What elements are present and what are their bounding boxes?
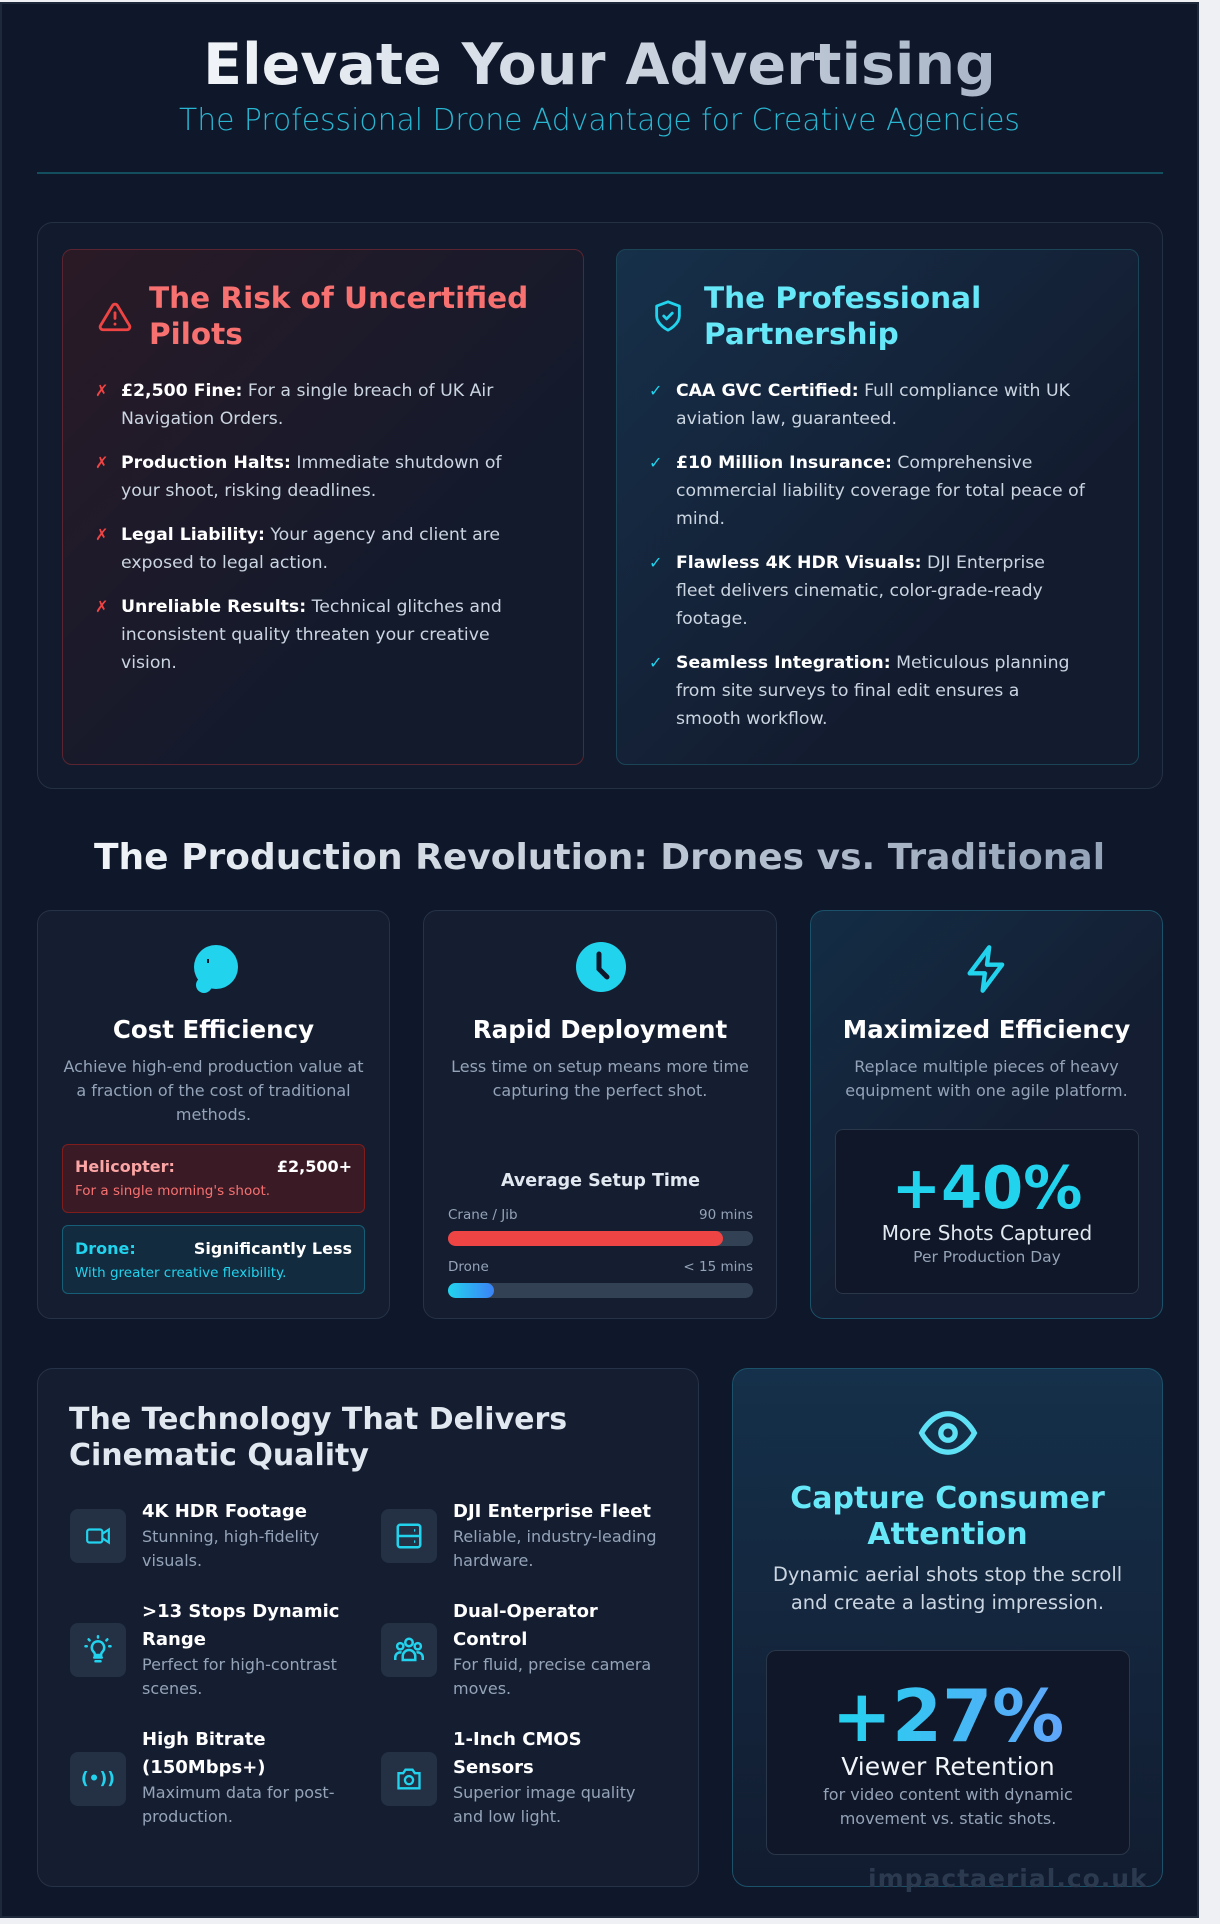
panel: risk of uncertified pilots [62, 249, 584, 765]
item: 4K HDR: fleet delivers cinematic, color-grade-ready [676, 581, 1043, 601]
item: CMOS: Sensors [453, 1757, 534, 1778]
item: fine: £2,500 Fine: For a single breach of UK Air [121, 381, 493, 401]
item: 4K HDR: Flawless 4K HDR Visuals: DJI Enterprise [676, 553, 1045, 573]
item: DJI fleet: hardware. [453, 1551, 533, 1570]
heading: Attention [867, 1517, 1028, 1552]
chart: average setup time: Crane / Jib [448, 1207, 518, 1223]
stat box: +27%: movement vs. static shots. [840, 1809, 1056, 1828]
item: dual operator: Control [453, 1629, 527, 1650]
item: bitrate: (150Mbps+) [142, 1757, 266, 1778]
title: Rapid Deployment [473, 1015, 727, 1044]
description: Achieve high-end production value at a fraction of the cost of traditional methods. [63, 1057, 364, 1124]
icon: clock [576, 942, 626, 992]
item: 4K HDR: Stunning, high-fidelity [142, 1527, 319, 1546]
box: drone: Drone: [75, 1239, 136, 1258]
item: integration [676, 653, 1070, 729]
item: dynamic range [70, 1601, 339, 1698]
title: Elevate Your Advertising [203, 32, 996, 98]
panel: professional partnership: ✓ [649, 381, 662, 400]
item: insurance [676, 453, 1086, 529]
item: 4K HDR [70, 1501, 319, 1570]
icon: piggy/coin [194, 945, 238, 993]
item: legal liability: exposed to legal action. [121, 553, 328, 573]
stat box: +27%: for video content with dynamic [823, 1785, 1073, 1804]
item: dual operator: Dual-Operator [453, 1601, 598, 1622]
panel: risk of uncertified pilots: ✗ [95, 597, 108, 616]
item: integration: from site surveys to final edit ensures a [676, 681, 1019, 701]
card: maximized efficiency [810, 910, 1163, 1319]
item: unreliable: Unreliable Results: Technical glitches and [121, 597, 502, 617]
icon: lightning [968, 945, 1004, 993]
item: DJI fleet: Reliable, industry-leading [453, 1527, 657, 1546]
section heading: The Production Revolution: Drones vs. Traditional [94, 837, 1105, 878]
item: unreliable [121, 597, 502, 673]
item: integration: Seamless Integration: Meticulous planning [676, 653, 1070, 673]
item: bitrate: (•)) [81, 1769, 115, 1789]
item: bitrate: High Bitrate [142, 1729, 266, 1750]
stat box: +40% [835, 1129, 1139, 1294]
item: 4K HDR: visuals. [142, 1551, 202, 1570]
item: CAA: CAA GVC Certified: Full compliance with UK [676, 381, 1070, 401]
item: CMOS: and low light. [453, 1807, 561, 1826]
item: DJI fleet [381, 1501, 657, 1570]
chart: average setup time: Drone [448, 1259, 489, 1275]
box: helicopter: For a single morning's shoot. [75, 1183, 270, 1199]
item: production halts [121, 453, 502, 501]
chart: average setup time [448, 1171, 753, 1298]
item: legal liability: Legal Liability: Your agency and client are [121, 525, 500, 545]
stat box: +27% [766, 1650, 1130, 1855]
box: helicopter: £2,500+ [277, 1157, 352, 1176]
heading: technology [69, 1402, 567, 1473]
box: drone [62, 1225, 365, 1294]
item: CMOS [381, 1729, 635, 1826]
item: dual operator: moves. [453, 1679, 511, 1698]
item: unreliable: inconsistent quality threaten your creative [121, 625, 490, 645]
panel: technology [37, 1368, 699, 1887]
item: bitrate: Maximum data for post- [142, 1783, 334, 1802]
stat box: +27%: +27% [832, 1674, 1064, 1758]
heading: risk [149, 281, 528, 351]
heading: risk: Pilots [149, 317, 243, 351]
panel: professional partnership: ✓ [649, 553, 662, 572]
item: CAA: aviation law, guaranteed. [676, 409, 897, 429]
item: fine: Navigation Orders. [121, 409, 283, 429]
card: rapid deployment [423, 910, 777, 1319]
item: fine [121, 381, 494, 429]
box: helicopter [62, 1144, 365, 1213]
item: CMOS: Superior image quality [453, 1783, 635, 1802]
item: CAA [676, 381, 1070, 429]
panel: professional partnership: ✓ [649, 653, 662, 672]
item: insurance: mind. [676, 509, 725, 529]
item: bitrate [70, 1729, 334, 1826]
chart: average setup time: 90 mins [699, 1207, 753, 1223]
item: CMOS: 1-Inch CMOS [453, 1729, 582, 1750]
item: 4K HDR: footage. [676, 609, 748, 629]
panel: professional partnership: ✓ [649, 453, 662, 472]
icon: warning [98, 302, 132, 332]
item: dynamic range: scenes. [142, 1679, 202, 1698]
description: Dynamic aerial shots stop the scroll [773, 1563, 1122, 1586]
box: helicopter: Helicopter: [75, 1157, 175, 1176]
heading: partnership: The Professional [704, 281, 981, 315]
heading: technology: The Technology That Delivers [69, 1402, 567, 1437]
heading: risk: The Risk of Uncertified [149, 281, 528, 315]
heading: Capture Consumer [790, 1481, 1105, 1516]
panel: risk of uncertified pilots: ✗ [95, 381, 108, 400]
item: dynamic range: Range [142, 1629, 206, 1650]
item: dynamic range: Perfect for high-contrast [142, 1655, 337, 1674]
item: dynamic range: >13 Stops Dynamic [142, 1601, 339, 1622]
heading: technology: Cinematic Quality [69, 1438, 369, 1473]
panel: capture consumer attention [732, 1368, 1163, 1887]
title: Maximized Efficiency [843, 1015, 1130, 1044]
title: Cost Efficiency [113, 1015, 314, 1044]
heading [790, 1481, 1105, 1552]
panel: risk vs partnership [37, 222, 1163, 789]
icon: shield [655, 300, 681, 332]
item: dual operator [381, 1601, 651, 1698]
item: legal liability [121, 525, 500, 573]
chart: average setup time: Average Setup Time [501, 1171, 700, 1191]
description: Less time on setup means more time capturing the perfect shot. [451, 1057, 749, 1100]
box: drone: With greater creative flexibility. [75, 1265, 286, 1281]
panel: risk of uncertified pilots: ✗ [95, 453, 108, 472]
item: insurance: £10 Million Insurance: Comprehensive [676, 453, 1032, 473]
item: DJI fleet: DJI Enterprise Fleet [453, 1501, 651, 1522]
heading: partnership [704, 281, 981, 351]
item: dual operator: For fluid, precise camera [453, 1655, 651, 1674]
description [773, 1563, 1122, 1614]
chart: average setup time: < 15 mins [683, 1259, 753, 1275]
subtitle: The Professional Drone Advantage for Creative Agencies [179, 103, 1020, 138]
icon: eye [918, 1411, 978, 1455]
watermark: impactaerial.co.uk [868, 1864, 1148, 1893]
item: unreliable: vision. [121, 653, 177, 673]
card: cost efficiency [37, 910, 390, 1319]
item: bitrate: production. [142, 1807, 233, 1826]
heading: partnership: Partnership [704, 317, 899, 351]
stat box: +27%: Viewer Retention [841, 1752, 1055, 1781]
item: 4K HDR: 4K HDR Footage [142, 1501, 307, 1522]
item: production halts: your shoot, risking deadlines. [121, 481, 376, 501]
stat box: +40%: Per Production Day [913, 1248, 1061, 1266]
item: 4K HDR [676, 553, 1045, 629]
stat box: +40%: +40% [892, 1153, 1082, 1222]
item: insurance: commercial liability coverage for total peace of [676, 481, 1085, 501]
stat box: +40%: More Shots Captured [882, 1221, 1092, 1245]
box: drone: Significantly Less [194, 1239, 352, 1258]
item: production halts: Production Halts: Immediate shutdown of [121, 453, 501, 473]
description: Replace multiple pieces of heavy equipment with one agile platform. [845, 1057, 1128, 1100]
panel: professional partnership [616, 249, 1139, 765]
panel: risk of uncertified pilots: ✗ [95, 525, 108, 544]
description: and create a lasting impression. [791, 1591, 1104, 1614]
item: integration: smooth workflow. [676, 709, 828, 729]
